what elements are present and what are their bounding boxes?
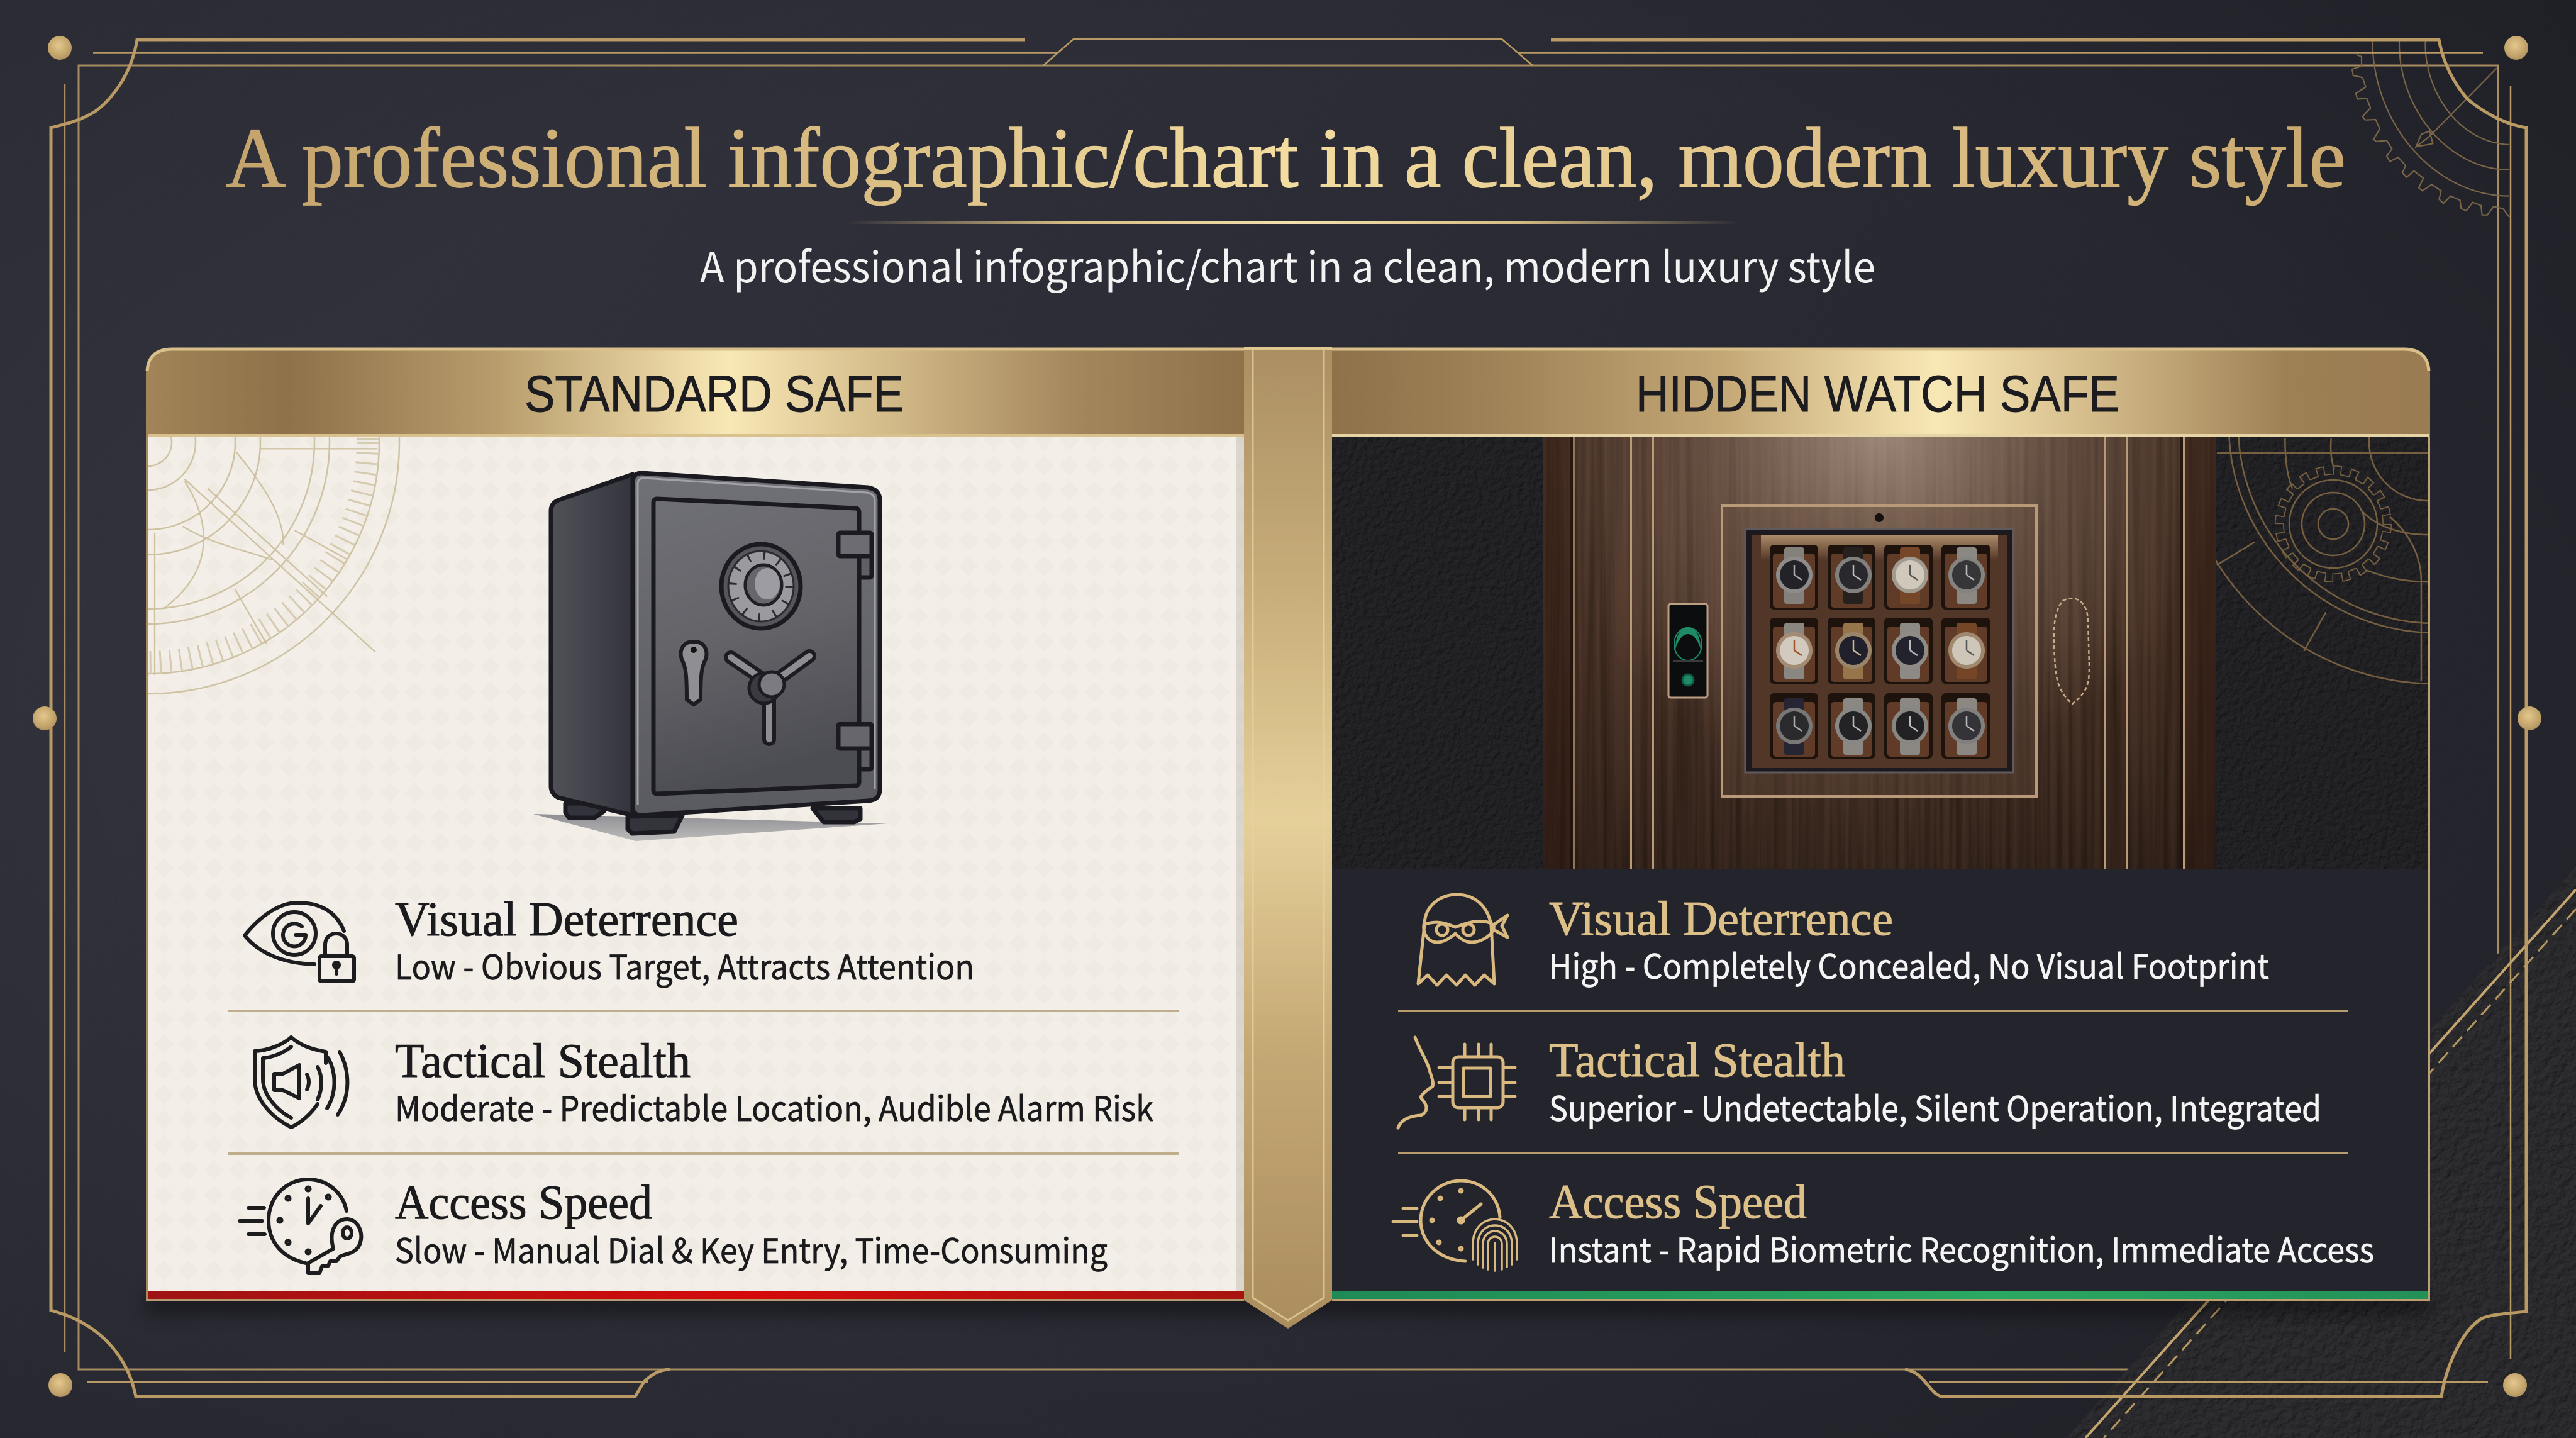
title: A professional infographic/chart in a clean, modern luxury style — [226, 110, 2346, 206]
icon: shield and speaker — [255, 1037, 347, 1127]
row: tactical stealth — [1398, 1033, 2321, 1131]
icon: masked ghost — [1418, 895, 1507, 985]
standard safe body — [146, 437, 1244, 1301]
subtitle: A professional infographic/chart in a clean, modern luxury style — [700, 234, 1875, 295]
green status bar — [1332, 1291, 2428, 1299]
photo: concealed wall safe — [1332, 168, 2576, 869]
watermark: compass — [148, 437, 400, 694]
leather wall right — [2216, 437, 2428, 869]
text: visual deterrence heading: Visual Deterrence — [1549, 891, 1893, 945]
inner edge shading — [1236, 437, 1244, 1291]
watermark: gear blueprint — [2216, 437, 2428, 684]
safe feet — [565, 803, 860, 833]
safe dial — [721, 544, 801, 628]
text: access speed heading: Access Speed — [395, 1175, 652, 1229]
panel shadow — [146, 1293, 2430, 1314]
safe floor shadow — [533, 814, 888, 841]
title rule — [846, 221, 1740, 224]
hidden safe body — [1332, 437, 2430, 1301]
camera dot — [1875, 513, 1884, 522]
safe handle — [731, 656, 809, 739]
text: access speed value: Slow - Manual Dial & Key Entry, Time-Consuming — [395, 1223, 1108, 1273]
hidden handle outline — [2054, 598, 2089, 704]
text: visual deterrence heading: Visual Deterrence — [395, 892, 738, 946]
watches — [1776, 547, 1985, 755]
text: tactical stealth value: Moderate - Predictable Location, Audible Alarm Risk — [395, 1081, 1153, 1131]
gold bottom and right edges — [1332, 377, 2429, 1300]
header: standard safe — [146, 348, 1244, 437]
header: hidden watch safe: HIDDEN WATCH SAFE — [1636, 365, 2119, 423]
row: access speed — [240, 1175, 1108, 1273]
left gold edge — [146, 377, 148, 1301]
watch cells — [1770, 545, 1990, 759]
text: visual deterrence value: Low - Obvious Target, Attracts Attention — [395, 940, 974, 989]
panel: standard safe — [146, 347, 1244, 1301]
safe door frame — [1722, 506, 2036, 796]
icon: eye and padlock — [245, 903, 354, 981]
wood panel — [1543, 437, 2216, 869]
text: access speed value: Instant - Rapid Biometric Recognition, Immediate Access — [1549, 1223, 2374, 1273]
text: tactical stealth value: Superior - Undetectable, Silent Operation, Integrated — [1549, 1081, 2321, 1131]
biometric keypad — [1668, 604, 1707, 698]
leather corner — [2067, 866, 2576, 1438]
illustration: standard safe — [533, 473, 888, 841]
row: visual deterrence — [245, 892, 974, 989]
icon: clock and key — [240, 1179, 361, 1273]
text: access speed heading: Access Speed — [1549, 1174, 1807, 1229]
leather wall left — [1332, 437, 1543, 869]
header: hidden watch safe — [1332, 348, 2430, 437]
gold bottom edge — [146, 1299, 1244, 1301]
panel: hidden watch safe — [1332, 347, 2430, 1301]
safe front — [633, 473, 880, 815]
safe door — [653, 499, 859, 794]
text: tactical stealth heading: Tactical Stealth — [1549, 1033, 1845, 1087]
icon: stopwatch and fingerprint — [1393, 1181, 1517, 1271]
text: tactical stealth heading: Tactical Stealth — [395, 1034, 691, 1088]
safe side — [551, 474, 633, 815]
center divider ribbon — [1244, 347, 1332, 1329]
text: visual deterrence value: High - Completely Concealed, No Visual Footprint — [1549, 939, 2269, 989]
row: tactical stealth — [255, 1034, 1153, 1131]
red status bar — [148, 1291, 1244, 1299]
icon: face and chip — [1398, 1037, 1515, 1128]
safe keyhole — [681, 642, 706, 705]
row: visual deterrence — [1418, 891, 2269, 989]
header: standard safe: STANDARD SAFE — [525, 365, 904, 423]
safe hinges — [838, 533, 872, 769]
row: access speed — [1393, 1174, 2374, 1273]
watch window — [1745, 529, 2013, 772]
watermark: top right gear — [2352, 41, 2509, 217]
